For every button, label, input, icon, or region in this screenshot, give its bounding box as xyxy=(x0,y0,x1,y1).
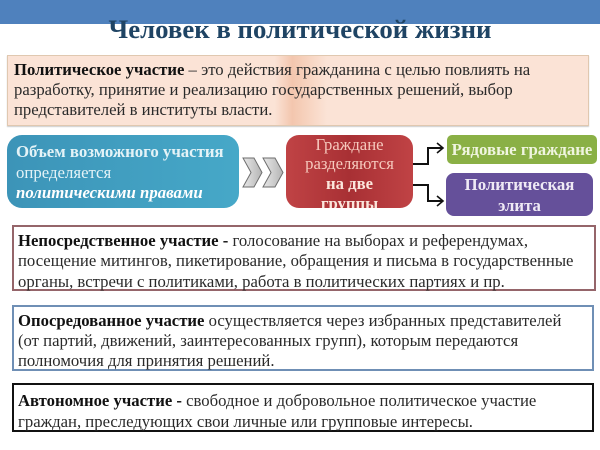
panel: political elite xyxy=(446,173,593,216)
panel: citizens are divided: разделяются xyxy=(305,154,394,173)
panel: scope of participation: политическими правами xyxy=(16,183,203,202)
panel: scope of participation: Объем возможного участия xyxy=(16,142,224,161)
title: Человек в политической жизни xyxy=(109,14,491,44)
panel: ordinary citizens xyxy=(447,135,597,164)
panel: citizens are divided: на две xyxy=(326,174,373,193)
panel: mediated participation: полномочия для принятия решений. xyxy=(18,351,274,370)
top banner xyxy=(0,0,600,24)
panel: direct participation xyxy=(12,225,596,291)
panel: autonomous participation: граждан, преследующих свои личные или групповые интересы. xyxy=(18,412,473,431)
panel: autonomous participation: Автономное участие - свободное и добровольное политическое участие xyxy=(18,391,536,410)
arrow: to political elite xyxy=(413,184,444,207)
icon: double chevron arrow xyxy=(242,158,284,188)
panel: political elite: элита xyxy=(498,196,541,215)
panel: citizens are divided xyxy=(286,135,413,208)
panel: citizens are divided: Граждане xyxy=(315,135,384,154)
panel: direct participation: Непосредственное участие - голосование на выборах и референдумах, xyxy=(18,231,528,250)
arrow: to ordinary citizens xyxy=(413,142,444,165)
panel: ordinary citizens: Рядовые граждане xyxy=(452,140,592,159)
panel: mediated participation: (от партий, движений, заинтересованных групп), которым передаются xyxy=(18,331,518,350)
panel: mediated participation: Опосредованное участие осуществляется через избранных представителей xyxy=(18,311,561,330)
panel: mediated participation xyxy=(12,305,594,371)
panel: definition of political participation xyxy=(7,55,589,126)
panel: direct participation: посещение митингов, пикетирование, обращения и письма в государственные xyxy=(18,251,573,270)
panel: political elite: Политическая xyxy=(465,175,574,194)
panel: definition of political participation: разработку, принятие и реализацию государственных решений, выбор xyxy=(14,80,513,99)
panel: scope of participation xyxy=(7,135,239,208)
panel: definition of political participation: Политическое участие – это действия гражданина с целью повлиять на xyxy=(14,60,530,79)
panel: scope of participation: определяется xyxy=(16,163,111,182)
panel: autonomous participation xyxy=(12,383,594,432)
panel: direct participation: органы, встречи с политиками, работа в политических партиях и пр. xyxy=(18,272,505,291)
panel: definition of political participation: представителей в институты власти. xyxy=(14,100,272,119)
